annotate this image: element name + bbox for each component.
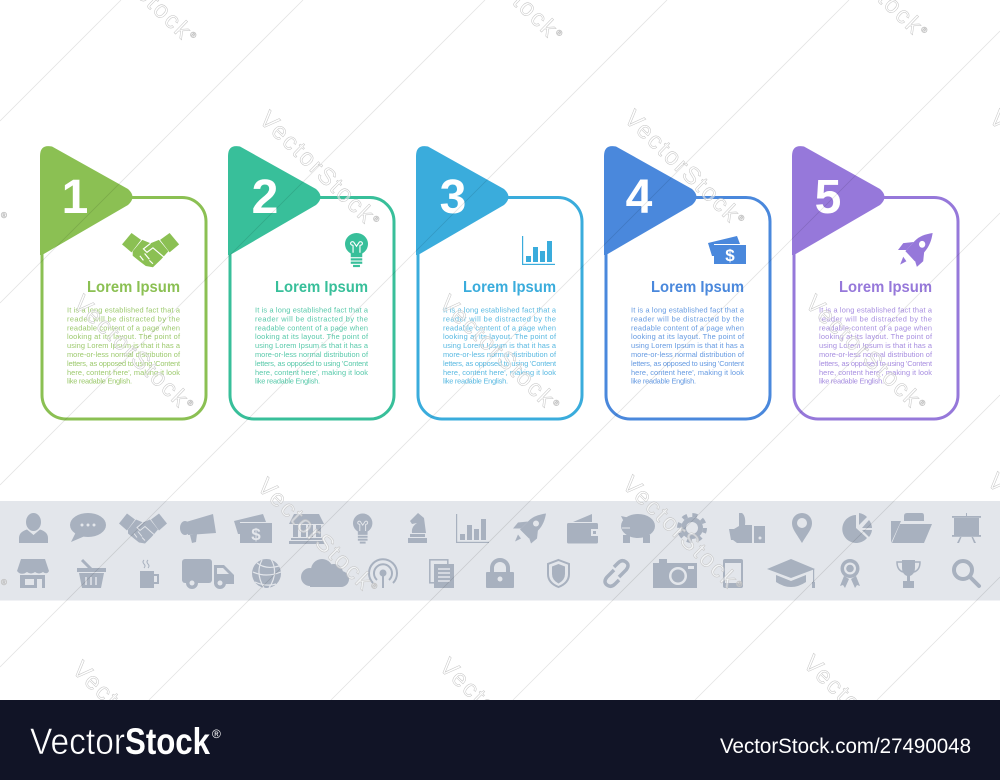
card 1 body text (67, 306, 181, 386)
card 5 body text: letters, as opposed to using 'Content (819, 359, 932, 368)
card 3 body text: reader will be distracted by the (443, 314, 556, 323)
card 2 body text: looking at its layout. The point of (255, 332, 369, 341)
icon: thumbs up (729, 513, 765, 543)
card 3 body text: letters, as opposed to using 'Content (443, 359, 556, 368)
panel: step 3 card (416, 146, 582, 419)
number 1: 1 (62, 171, 88, 224)
card 2 triangle tab (228, 146, 320, 255)
card 2 body text: like readable English. (255, 377, 320, 386)
card 4 body text: reader will be distracted by the (631, 314, 744, 323)
card 5 body text: It is a long established fact that a (819, 306, 933, 314)
number 4: 4 (626, 171, 653, 224)
icon: folder (891, 513, 932, 543)
watermark: repeated VectorStock text: ® (1, 211, 7, 220)
icon: shop (17, 559, 49, 588)
watermark: repeated VectorStock text: VectorStock (67, 656, 192, 778)
card 1 triangle tab (40, 146, 132, 255)
watermark: repeated VectorStock text: ® (734, 579, 744, 589)
card 5 body text: looking at its layout. The point of (819, 332, 933, 341)
card 1 body text: more-or-less normal distribution of (67, 350, 181, 359)
icon: delivery truck (182, 559, 234, 589)
card 4 body text: looking at its layout. The point of (631, 332, 745, 341)
watermark: repeated VectorStock text: ® (184, 764, 194, 774)
icon: magnifier (954, 561, 979, 586)
icon: speech bubble (70, 513, 106, 542)
watermark: repeated VectorStock text: VectorStock (434, 653, 559, 775)
card 3 body text: looking at its layout. The point of (443, 332, 557, 341)
card 4 body text: It is a long established fact that a (631, 306, 745, 314)
icon: presentation board (952, 513, 981, 543)
watermark: repeated VectorStock text: ® (551, 398, 561, 408)
card 4 heading: Lorem Ipsum (651, 279, 744, 296)
icon: gear (679, 515, 705, 541)
watermark: repeated VectorStock text: VectorStock (434, 290, 559, 412)
icon: bank (289, 514, 324, 544)
card 5 outline (794, 198, 958, 419)
card 2 body text (255, 306, 369, 386)
number 5: 5 (815, 171, 841, 224)
panel: icon strip (0, 501, 1000, 600)
icon: coffee mug (140, 560, 158, 588)
card 2 body text: using Lorem Ipsum is that it has a (255, 341, 369, 350)
icon: map pin (792, 513, 812, 543)
footer logo: Stock (125, 721, 210, 762)
card 2 heading: Lorem Ipsum (275, 279, 368, 296)
card 3 body text: readable content of a page when (443, 323, 556, 332)
watermark: repeated VectorStock text: VectorStock (254, 106, 379, 228)
card 2 body text: readable content of a page when (255, 323, 368, 332)
watermark: repeated VectorStock text: VectorStock (798, 650, 923, 772)
icon: padlock (486, 560, 514, 588)
watermark: repeated VectorStock text: ® (369, 581, 379, 591)
card 1 body text: readable content of a page when (67, 323, 180, 332)
icon: pie chart (842, 513, 872, 543)
icon: light bulb (345, 233, 368, 267)
icon: chain link (605, 561, 628, 586)
card 4 triangle tab (604, 146, 696, 255)
card 5 body text: using Lorem Ipsum is that it has a (819, 341, 933, 350)
icon: wallet (567, 514, 598, 544)
card 1 body text: It is a long established fact that a (67, 306, 181, 314)
watermark: repeated VectorStock text: ® (915, 758, 925, 768)
card 3 body text: like readable English. (443, 377, 508, 386)
footer image id: VectorStock.com/27490048 (720, 735, 971, 758)
icon: piggy bank (621, 514, 655, 543)
icon: handshake (119, 514, 167, 544)
card 2 body text: letters, as opposed to using 'Content (255, 359, 368, 368)
icon: banknotes (234, 514, 272, 544)
card 3 body text: here, content here', making it look (443, 368, 556, 377)
number 2: 2 (252, 171, 278, 224)
icon: banknotes: $ (725, 246, 735, 265)
watermark: repeated VectorStock text: VectorStock (252, 473, 377, 595)
icon: rocket (513, 514, 546, 544)
card 1 heading: Lorem Ipsum (87, 279, 180, 296)
footer logo: ® (212, 727, 221, 741)
watermark: repeated VectorStock text: ® (736, 213, 746, 223)
icon: rocket (898, 233, 933, 267)
card 2 body text: here, content here', making it look (255, 368, 368, 377)
panel: step 2 card (228, 146, 394, 419)
icon: bar chart (456, 514, 489, 543)
card 3 body text: It is a long established fact that a (443, 306, 557, 314)
card 5 body text: reader will be distracted by the (819, 314, 932, 323)
card 4 body text (631, 306, 745, 386)
card 4 body text: readable content of a page when (631, 323, 744, 332)
icon: award ribbon (840, 559, 860, 588)
icon: shield (548, 560, 569, 587)
watermark: repeated VectorStock text: VectorStock (68, 290, 193, 412)
card 1 body text: using Lorem Ipsum is that it has a (67, 341, 181, 350)
icon: camera (653, 559, 697, 588)
card 3 body text: more-or-less normal distribution of (443, 350, 557, 359)
number 3: 3 (440, 171, 466, 224)
watermark: repeated VectorStock text: VectorStock (619, 105, 744, 227)
card 4 body text: like readable English. (631, 377, 696, 386)
icon: broadcast signal (369, 559, 397, 588)
watermark: repeated VectorStock text: ® (919, 25, 929, 35)
watermark: repeated VectorStock text: ® (917, 398, 927, 408)
card 5 body text (819, 306, 933, 386)
icon: trophy (897, 560, 920, 588)
icon: megaphone (180, 514, 216, 543)
icon: banknotes (708, 236, 746, 265)
icon: banknotes: $ (251, 525, 261, 544)
card 3 heading: Lorem Ipsum (463, 279, 556, 296)
card 4 body text: more-or-less normal distribution of (631, 350, 745, 359)
icon: globe (252, 559, 281, 588)
card 4 body text: using Lorem Ipsum is that it has a (631, 341, 745, 350)
card 5 body text: here, content here', making it look (819, 368, 932, 377)
icon: basket (77, 560, 106, 588)
watermark: repeated VectorStock text: VectorStock (800, 290, 925, 412)
icon: person (19, 513, 48, 543)
card 1 body text: here, content here', making it look (67, 368, 180, 377)
icon: light bulb (353, 514, 372, 544)
panel: step 1 card (40, 146, 206, 419)
card 4 body text: here, content here', making it look (631, 368, 744, 377)
card 1 outline (42, 198, 206, 419)
watermark: repeated VectorStock text: ® (185, 398, 195, 408)
card 5 body text: like readable English. (819, 377, 884, 386)
watermark: repeated VectorStock text: ® (1, 578, 7, 587)
card 1 body text: reader will be distracted by the (67, 314, 180, 323)
watermark: repeated VectorStock text: ® (371, 214, 381, 224)
icon: bar chart (522, 236, 555, 265)
card 4 outline (606, 198, 770, 419)
card 4 body text: letters, as opposed to using 'Content (631, 359, 744, 368)
card 2 body text: reader will be distracted by the (255, 314, 368, 323)
icon: handshake (122, 233, 179, 267)
footer bar (0, 700, 1000, 780)
card 3 outline (418, 198, 582, 419)
card 1 body text: looking at its layout. The point of (67, 332, 181, 341)
footer logo: Vector (30, 721, 125, 762)
card 5 heading: Lorem Ipsum (839, 279, 932, 296)
icon: chess knight (408, 513, 427, 543)
card 2 outline (230, 198, 394, 419)
card 5 body text: readable content of a page when (819, 323, 932, 332)
card 5 triangle tab (792, 146, 884, 255)
card 3 body text: using Lorem Ipsum is that it has a (443, 341, 557, 350)
panel: step 5 card (792, 146, 958, 419)
icon: graduation cap (767, 559, 815, 588)
card 3 triangle tab (416, 146, 508, 255)
panel: step 4 card (604, 146, 770, 419)
icon: cloud (301, 559, 349, 587)
watermark: repeated VectorStock text: ® (554, 28, 564, 38)
icon: tablet (723, 559, 743, 588)
icon: documents (430, 560, 454, 588)
card 2 body text: more-or-less normal distribution of (255, 350, 369, 359)
watermark: repeated VectorStock text: ® (551, 761, 561, 771)
card 5 body text: more-or-less normal distribution of (819, 350, 933, 359)
footer logo (30, 721, 221, 762)
card 3 body text (443, 306, 557, 386)
watermark: repeated VectorStock text: VectorStock (617, 471, 742, 593)
card 1 body text: letters, as opposed to using 'Content (67, 359, 180, 368)
card 2 body text: It is a long established fact that a (255, 306, 369, 314)
card 1 body text: like readable English. (67, 377, 132, 386)
watermark: repeated VectorStock text: ® (188, 30, 198, 40)
